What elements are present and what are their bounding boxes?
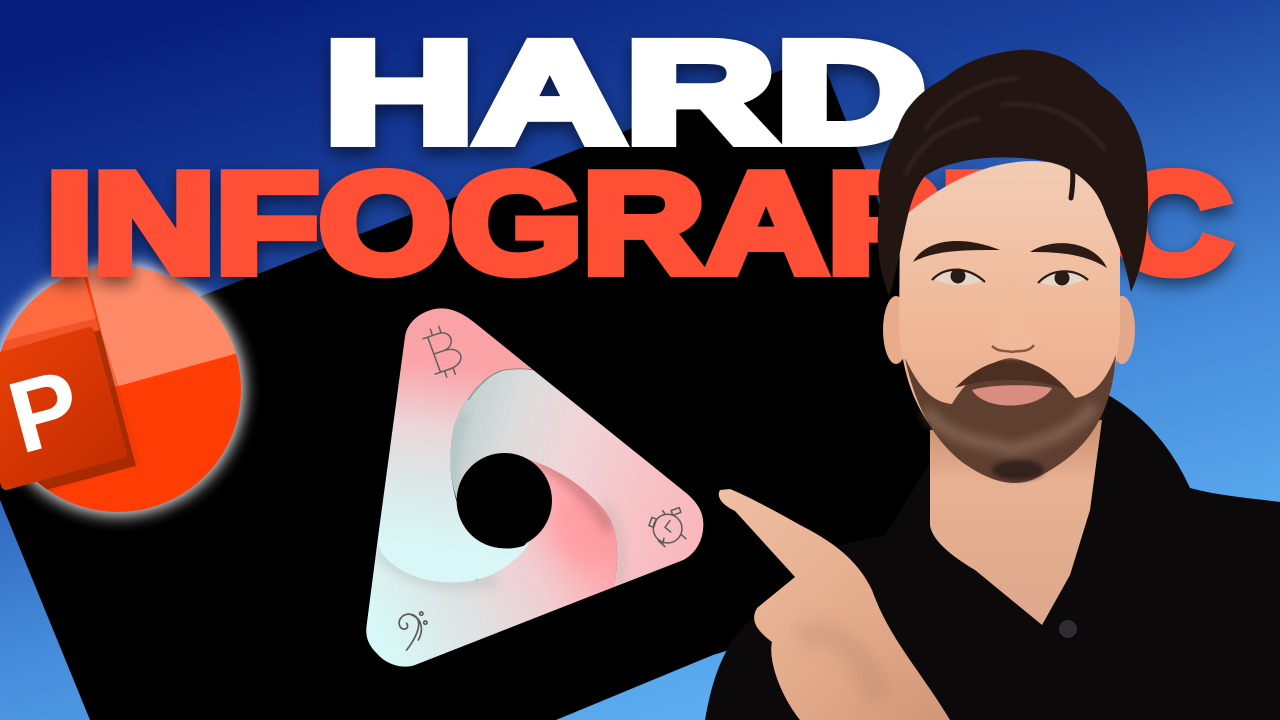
hand pointing left bbox=[719, 489, 950, 720]
face bbox=[899, 161, 1120, 484]
icon: PowerPoint logo: P bbox=[0, 348, 92, 475]
heading: INFOGRAPHIC: INFOGRAPHIC bbox=[46, 144, 1232, 303]
nose bbox=[992, 280, 1036, 355]
left ear bbox=[883, 296, 909, 364]
title: HARD INFOGRAPHIC bbox=[46, 12, 1232, 303]
hole in the centre bbox=[457, 453, 552, 548]
mouth bbox=[972, 385, 1052, 406]
background: rotated black panel bbox=[0, 55, 1020, 720]
right eye bbox=[1038, 270, 1088, 286]
icon: alarm clock bbox=[649, 508, 686, 547]
segment: upper right band bbox=[451, 369, 703, 587]
segment: left band with pink top bbox=[378, 308, 533, 582]
icon: bass clef bbox=[399, 612, 427, 650]
left eye bbox=[932, 268, 985, 285]
person: presenter pointing at the infographic bbox=[705, 50, 1280, 720]
right ear bbox=[1109, 296, 1135, 364]
segment: lower band with red hump bbox=[366, 453, 625, 667]
left eyebrow bbox=[913, 241, 1000, 262]
beard bbox=[905, 355, 1116, 483]
hair bbox=[878, 50, 1148, 296]
icon: PowerPoint logo bbox=[0, 240, 260, 520]
heading: HARD: HARD bbox=[324, 12, 926, 173]
icon: bitcoin bbox=[421, 323, 466, 380]
right eyebrow bbox=[1030, 243, 1107, 268]
collar button bbox=[1059, 620, 1077, 638]
shirt bbox=[705, 395, 1280, 720]
neck bbox=[930, 420, 1102, 625]
graphic: triangular swirl infographic bbox=[366, 308, 703, 667]
